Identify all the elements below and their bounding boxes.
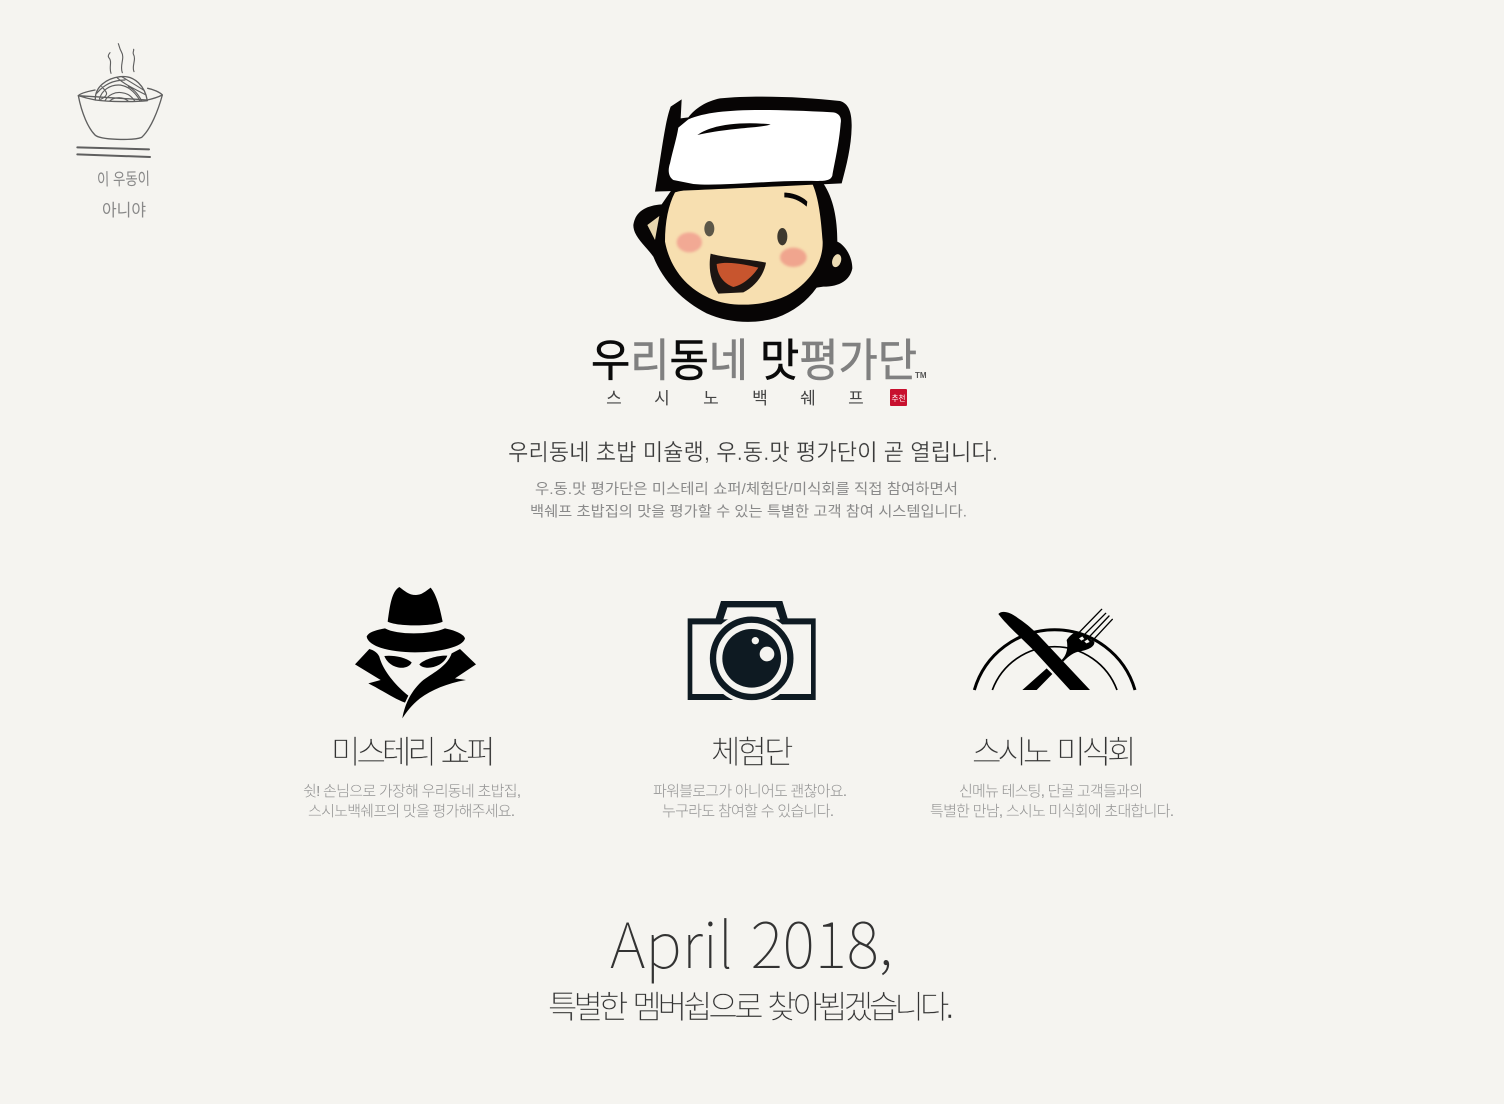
icon: camera <box>688 601 816 704</box>
heading: 체험단 <box>711 734 793 770</box>
trademark: TM <box>915 371 927 380</box>
logo subtitle: 백 <box>752 389 768 408</box>
hat crease <box>697 123 771 135</box>
logo wordmark <box>591 324 927 408</box>
logo subtitle: 스 <box>606 389 622 408</box>
description: 누구라도 참여할 수 있습니다. <box>662 803 834 820</box>
intro paragraph: 우.동.맛 평가단은 미스테리 쇼퍼/체험단/미식회를 직접 참여하면서 <box>535 481 958 498</box>
closing date: April 2018, <box>610 896 893 987</box>
hat white <box>669 110 841 185</box>
logo subtitle: 프 <box>848 389 864 408</box>
hat outline <box>655 97 852 192</box>
tongue <box>717 263 758 287</box>
mouth <box>710 254 766 294</box>
head outline <box>633 183 852 322</box>
description: 파워블로그가 아니어도 괜찮아요. <box>653 783 847 800</box>
logo subtitle <box>606 389 864 408</box>
heading: 미스테리 쇼퍼 <box>331 734 492 770</box>
description <box>303 783 521 820</box>
face <box>665 184 823 305</box>
description <box>930 783 1174 820</box>
icon: detective <box>355 587 476 718</box>
logo subtitle: 시 <box>654 389 670 408</box>
eyebrow <box>784 193 807 207</box>
logo subtitle: 쉐 <box>800 389 816 408</box>
intro paragraph <box>530 481 967 520</box>
panel: experience group <box>653 601 847 820</box>
logo title: 우리동네 맛평가단 <box>591 324 917 389</box>
description: 신메뉴 테스팅, 단골 고객들과의 <box>959 783 1143 800</box>
panel: mystery shopper <box>303 587 521 820</box>
left ear <box>647 216 659 240</box>
right ear <box>830 253 843 268</box>
logo subtitle: 노 <box>703 389 719 408</box>
left cheek <box>677 232 702 252</box>
icon: plate, knife and fork <box>974 609 1135 690</box>
intro paragraph: 백쉐프 초밥집의 맛을 평가할 수 있는 특별한 고객 참여 시스템입니다. <box>530 504 967 520</box>
heading: 스시노 미식회 <box>972 734 1133 770</box>
corner mark: noodle bowl with handwritten note <box>77 44 162 220</box>
handwritten note line 2: 아니야 <box>102 201 146 220</box>
panel: tasting dinner <box>930 609 1174 820</box>
closing message: 특별한 멤버쉽으로 찾아뵙겠습니다. <box>548 989 951 1025</box>
left eye <box>704 221 714 236</box>
description: 쉿! 손님으로 가장해 우리동네 초밥집, <box>303 783 521 800</box>
headline: 우리동네 초밥 미슐랭, 우.동.맛 평가단이 곧 열립니다. <box>508 439 998 465</box>
description <box>653 783 847 820</box>
mascot: chef character <box>633 97 852 322</box>
right eye <box>777 228 787 245</box>
icon: noodle bowl and chopsticks <box>77 44 162 157</box>
description: 스시노백쉐프의 맛을 평가해주세요. <box>308 803 515 820</box>
red seal <box>890 389 907 406</box>
description: 특별한 만남, 스시노 미식회에 초대합니다. <box>930 803 1174 820</box>
right cheek <box>780 248 807 267</box>
handwritten note line 1: 이 우동이 <box>97 169 150 189</box>
red seal: 추천 <box>892 393 906 403</box>
